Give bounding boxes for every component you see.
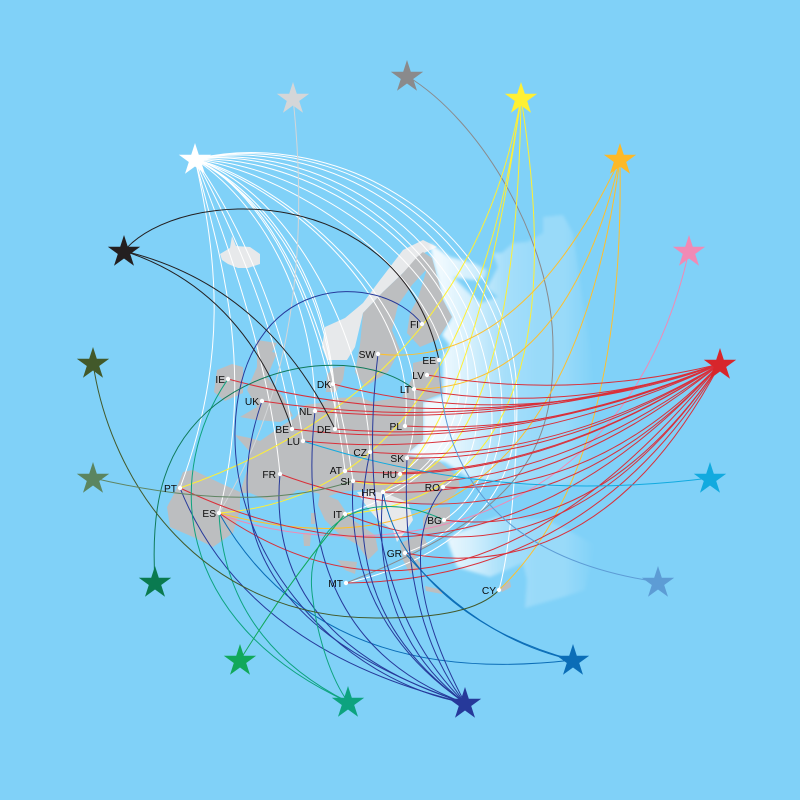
country code labels: LV — [412, 371, 424, 382]
Iberia — [167, 470, 240, 547]
country code labels: IE — [215, 375, 225, 386]
country code labels: PL — [390, 422, 402, 433]
arcs from orange star — [219, 159, 620, 590]
arc from grey star — [346, 76, 553, 583]
star: black — [108, 235, 140, 266]
Sweden — [355, 252, 426, 387]
country code labels: BG — [427, 516, 442, 527]
star: olive — [77, 347, 109, 378]
star: cyan — [694, 462, 726, 493]
country code labels: MT — [328, 579, 343, 590]
Corsica — [311, 513, 316, 524]
country code labels: SK — [390, 454, 404, 465]
arcs from yellow star — [180, 98, 534, 514]
country code labels: GR — [387, 549, 402, 560]
arcs from navy star — [180, 292, 465, 703]
Finland — [407, 252, 452, 347]
arc from pink star — [219, 251, 689, 536]
Norway — [322, 240, 437, 360]
map: EU member states — [167, 252, 511, 594]
country code labels: HR — [361, 488, 376, 499]
country code labels: NL — [299, 407, 312, 418]
star: pink — [673, 235, 705, 266]
Denmark — [326, 366, 345, 392]
Balkans — [357, 490, 413, 542]
country code labels: DE — [317, 425, 331, 436]
star: teal — [332, 686, 364, 717]
Switzerland — [298, 465, 327, 480]
country code labels: FR — [262, 470, 276, 481]
country code labels: DK — [317, 380, 331, 391]
country code labels: SW — [359, 350, 375, 361]
star: orange — [604, 143, 636, 174]
Turkey and Middle East — [447, 517, 595, 608]
arc from sage star — [93, 478, 353, 497]
arcs from black star — [124, 209, 439, 429]
Cyprus — [500, 581, 511, 592]
star: light grey — [277, 82, 309, 113]
country code labels: RO — [425, 483, 440, 494]
star: white — [179, 143, 211, 174]
United Kingdom — [240, 340, 293, 422]
arc from cyan star — [303, 441, 710, 486]
country code labels: EE — [422, 356, 436, 367]
arc from green star — [240, 514, 345, 660]
arcs from blue star — [219, 492, 573, 664]
arc from light grey star — [219, 98, 299, 513]
star: dark green — [139, 566, 171, 597]
arcs from red star — [180, 364, 720, 583]
star: green — [224, 644, 256, 675]
country code labels: AT — [330, 466, 342, 477]
Bulgaria — [423, 507, 450, 534]
star: sage — [77, 462, 109, 493]
country code labels: CY — [482, 586, 496, 597]
country code labels: PT — [164, 484, 177, 495]
star: navy — [449, 687, 481, 718]
country code labels: SI — [340, 477, 350, 488]
arcs from white star — [180, 153, 517, 590]
Italy — [318, 493, 378, 560]
star: blue — [557, 644, 589, 675]
arcs from teal star — [191, 379, 444, 702]
star: grey — [391, 60, 423, 91]
country code labels: IT — [333, 510, 342, 521]
Crete — [425, 586, 443, 594]
star: red — [704, 348, 736, 379]
Ireland — [214, 364, 243, 401]
arc from light blue star — [439, 360, 658, 582]
Russia and eastern land — [405, 215, 600, 487]
Sicily — [337, 560, 357, 574]
country code labels: LU — [287, 437, 300, 448]
country code labels: LT — [400, 385, 411, 396]
country code labels: ES — [202, 509, 216, 520]
star: light blue — [642, 566, 674, 597]
Baltic states — [402, 357, 443, 402]
country code labels: UK — [245, 397, 259, 408]
country code labels — [164, 320, 496, 597]
country code labels: FI — [410, 320, 419, 331]
country code labels: HU — [382, 470, 397, 481]
Iceland — [220, 236, 260, 268]
Sardinia — [303, 533, 311, 546]
central Europe — [235, 397, 460, 503]
arc from olive star — [93, 363, 499, 618]
star: yellow — [505, 82, 537, 113]
map: non-EU land — [220, 215, 600, 608]
country code labels: CZ — [353, 448, 367, 459]
Greece — [400, 534, 428, 574]
country code labels: BE — [275, 425, 289, 436]
arc from dark green star — [154, 365, 414, 582]
country markers — [178, 322, 501, 592]
